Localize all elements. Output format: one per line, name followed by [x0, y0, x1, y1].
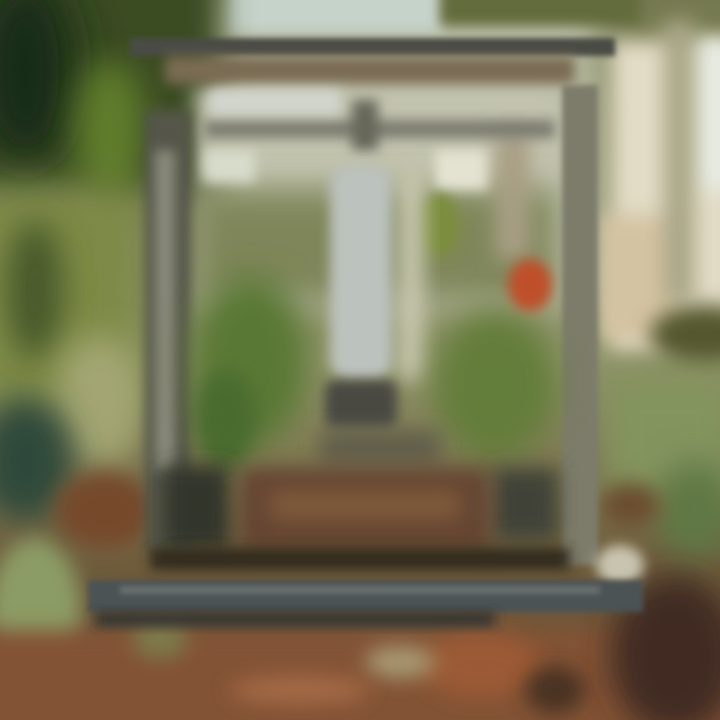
- arbor: left post: [145, 110, 191, 550]
- foliage: left tree mass: [0, 0, 220, 682]
- statue: central white figure: [325, 165, 397, 428]
- plant: left green plant: [165, 275, 308, 550]
- foliage: right shrubs: [600, 375, 720, 560]
- plant: right green plant: [433, 310, 558, 540]
- arbor: bottom beam: [88, 580, 643, 626]
- background: pale sky and distant foliage: [200, 0, 720, 365]
- planter: soil bed: [150, 430, 570, 570]
- arbor: right post: [562, 85, 598, 565]
- ground: brown mulch: [0, 545, 720, 720]
- arbor openings: pale background inside frame: [195, 85, 560, 380]
- arbor: top beam: [130, 38, 615, 150]
- flower: red bloom: [508, 259, 552, 311]
